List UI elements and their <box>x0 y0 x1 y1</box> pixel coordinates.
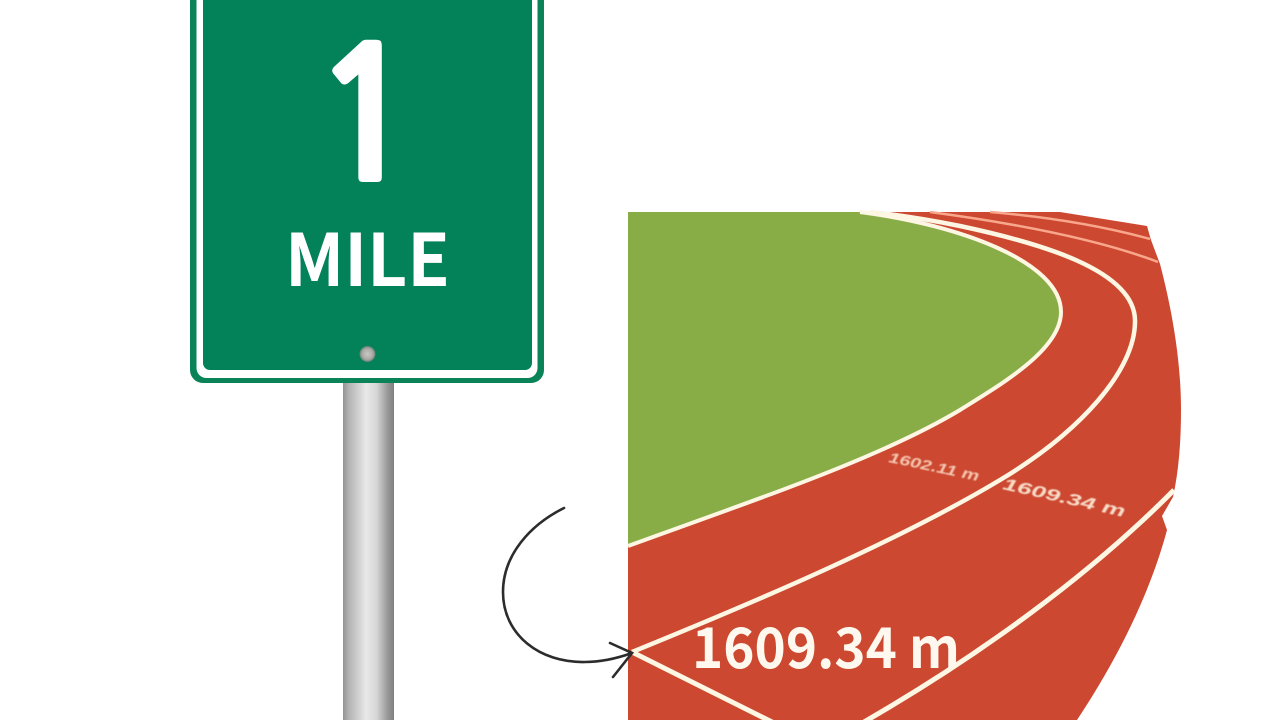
track surface <box>628 212 1181 720</box>
sign label: MILE <box>285 202 450 307</box>
sign panel <box>190 0 544 383</box>
sign number: 1 <box>311 28 421 208</box>
distance label: main: 1609.34 m <box>692 604 960 685</box>
road sign post <box>190 0 544 720</box>
pole <box>343 380 394 720</box>
distance label: second lane: 1609.34 m <box>1001 474 1127 521</box>
curved arrow to start line <box>503 508 632 677</box>
infield grass <box>628 212 1061 546</box>
running track <box>628 212 1181 720</box>
sign bolt <box>360 346 376 362</box>
lane lines <box>628 212 1174 720</box>
distance label: first lane: 1602.11 m <box>887 449 981 485</box>
